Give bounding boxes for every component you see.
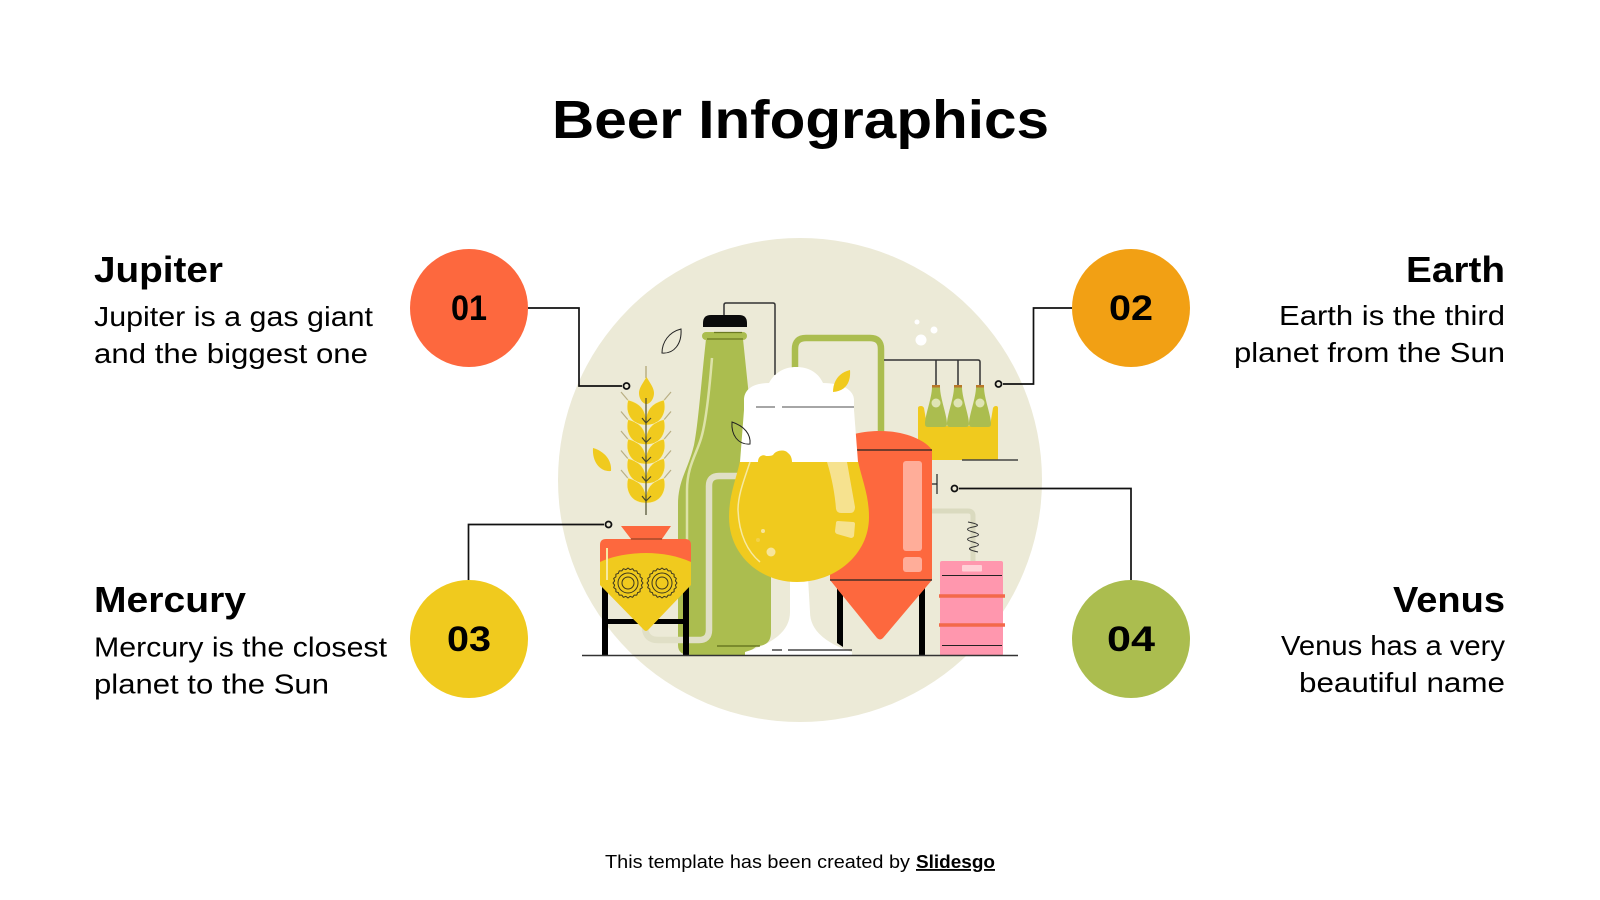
thin line from bottle cap (724, 303, 775, 375)
hopper (600, 526, 691, 655)
glass right highlight (827, 462, 855, 513)
text block: Venus: beautiful name (1299, 667, 1505, 698)
bottle highlight (687, 358, 712, 545)
beer bottle (678, 315, 771, 655)
number badge 04: 04 (1107, 620, 1156, 659)
bottle base line (717, 645, 760, 647)
beer bubbles (756, 529, 776, 556)
crate bottle middle (947, 385, 969, 427)
gear right (647, 568, 677, 598)
hopper orange top (600, 539, 691, 562)
stem (645, 366, 647, 378)
tank lines (830, 450, 932, 580)
tank highlight (903, 461, 922, 551)
number badge 03: 03 (447, 620, 491, 659)
illustration: brewery scene (582, 303, 1018, 656)
wheat stalk (621, 366, 671, 515)
keg body (940, 561, 1003, 656)
number badge 01 (410, 249, 528, 367)
spring (968, 522, 978, 552)
connector 01 (528, 308, 630, 389)
pale pipe to keg (932, 511, 973, 565)
glass small highlight (835, 521, 855, 538)
text block: Earth: Earth (1406, 249, 1505, 290)
glass left highlight (738, 462, 760, 562)
foam (740, 367, 858, 462)
foam bumps (758, 451, 792, 462)
text block: Earth (1234, 249, 1505, 368)
text block: Venus: Venus has a very (1281, 630, 1505, 661)
text block: Mercury: Mercury is the closest (94, 632, 387, 662)
green tube (795, 338, 881, 436)
funnel line (631, 538, 662, 540)
text block: Jupiter: Jupiter is a gas giant (94, 301, 373, 332)
text block: Mercury (94, 579, 387, 700)
bottle crate (918, 385, 998, 460)
crate shelf line (962, 459, 1018, 461)
keg handle (962, 565, 982, 572)
text block: Mercury: planet to the Sun (94, 668, 329, 700)
tank body (830, 431, 932, 640)
keg lines (942, 576, 1002, 646)
foot lines (772, 649, 852, 651)
yellow leaf left (593, 448, 611, 471)
pale pipe across bottle (645, 476, 750, 640)
bottle body (678, 339, 771, 655)
foam lines (756, 406, 854, 408)
beer glass (729, 367, 869, 655)
illustration backdrop circle (558, 238, 1042, 722)
gear left (613, 568, 643, 598)
number badge 02 (1072, 249, 1190, 367)
hopper highlight (606, 548, 608, 580)
tank highlight small (903, 557, 922, 572)
beards (621, 392, 671, 483)
connector 02 (996, 308, 1072, 387)
footer credit: This template has been created by (605, 851, 911, 872)
top kernel (639, 377, 654, 404)
bottle cap (703, 315, 747, 327)
crate bottle left (925, 385, 947, 427)
footer credit: Slidesgo (916, 851, 995, 872)
number badge 02: 02 (1109, 289, 1153, 328)
outline leaf top (662, 329, 681, 353)
valve (932, 474, 937, 494)
beer (729, 461, 869, 582)
text block: Earth: Earth is the third (1279, 300, 1505, 331)
keg (939, 561, 1005, 656)
text block: Venus (1281, 579, 1505, 698)
number badge 01: 01 (451, 289, 487, 328)
kernels (627, 400, 665, 503)
text block: Mercury: Mercury (94, 579, 246, 620)
connector 04 (952, 486, 1131, 580)
tank legs (837, 585, 925, 655)
hopper funnel (621, 526, 671, 539)
bottle neck lines (707, 332, 743, 339)
bubbles (914, 320, 938, 346)
text block: Earth: planet from the Sun (1234, 337, 1505, 368)
hopper legs (602, 585, 689, 655)
text block: Jupiter (94, 249, 373, 369)
crate bottle right (969, 385, 991, 427)
connector 03 (468, 522, 612, 580)
stalk and chevrons (642, 398, 651, 515)
yellow leaf on glass (833, 370, 850, 392)
outline leaf on glass (732, 422, 750, 444)
text block: Venus: Venus (1393, 579, 1505, 620)
keg bands (939, 596, 1005, 625)
text block: Jupiter: Jupiter (94, 249, 223, 290)
ground line (582, 654, 1018, 656)
filler lines above crate (884, 360, 980, 385)
number badge 04 (1072, 580, 1190, 698)
text block: Jupiter: and the biggest one (94, 338, 368, 369)
hopper yellow body (600, 545, 691, 631)
glass stem and foot (745, 578, 852, 655)
tank (830, 431, 937, 655)
bottle neck ring (702, 332, 747, 340)
title: Beer Infographics (552, 90, 1049, 150)
number badge 03 (410, 580, 528, 698)
crate body (918, 406, 998, 460)
